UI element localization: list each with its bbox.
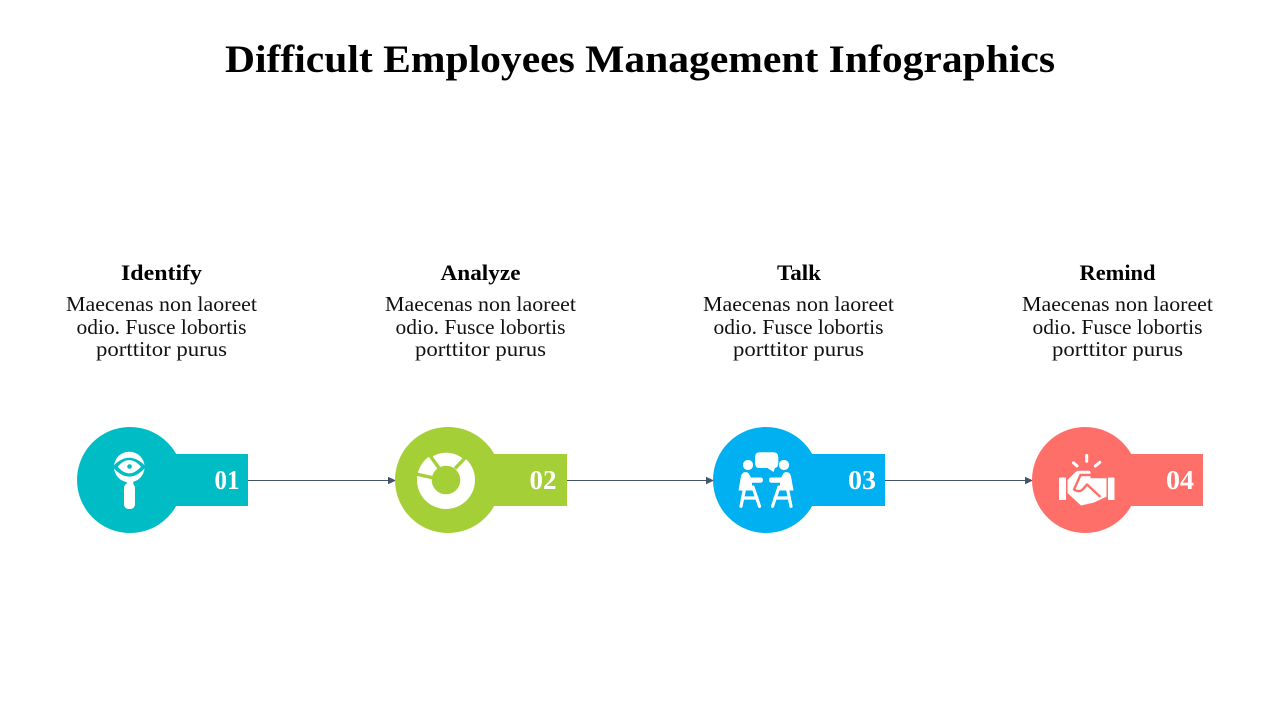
panel: remind <box>1022 260 1213 533</box>
text block: remind: Maecenas non laoreet <box>1022 292 1213 316</box>
text block: talk: Maecenas non laoreet <box>703 292 894 316</box>
badge: 02 <box>395 427 567 533</box>
icon: magnifying glass with eye <box>112 452 146 509</box>
heading: remind: Remind <box>1080 260 1156 285</box>
text block: remind <box>1022 292 1213 361</box>
text block: analyze: odio. Fusce lobortis <box>396 315 566 339</box>
text block: analyze: porttitor purus <box>415 337 546 361</box>
heading: talk: Talk <box>777 260 822 285</box>
text block: identify: porttitor purus <box>96 337 227 361</box>
text block: talk: odio. Fusce lobortis <box>714 315 884 339</box>
icon: donut chart <box>416 451 475 509</box>
arrow: 03 to 04 <box>885 477 1033 484</box>
panel: identify <box>66 260 257 533</box>
text block: talk <box>703 292 894 361</box>
panel: talk <box>703 260 894 533</box>
icon: handshake <box>1059 456 1114 506</box>
icon: two people talking <box>738 452 794 506</box>
arrow: 02 to 03 <box>567 477 714 484</box>
text block: identify: Maecenas non laoreet <box>66 292 257 316</box>
text block: remind: porttitor purus <box>1052 337 1183 361</box>
badge: 03 <box>713 427 885 533</box>
panel: analyze <box>385 260 576 533</box>
text block: talk: porttitor purus <box>733 337 864 361</box>
text block: identify: odio. Fusce lobortis <box>76 315 246 339</box>
text block: remind: odio. Fusce lobortis <box>1032 315 1202 339</box>
badge: 04 <box>1032 427 1203 533</box>
title: Difficult Employees Management Infographics <box>225 38 1055 81</box>
text block: analyze: Maecenas non laoreet <box>385 292 576 316</box>
number 03: 03 <box>848 465 876 495</box>
number 02: 02 <box>530 465 556 495</box>
text block: identify <box>66 292 257 361</box>
badge: 01 <box>77 427 248 533</box>
arrow: 01 to 02 <box>248 477 396 484</box>
number 01: 01 <box>214 465 240 495</box>
heading: analyze: Analyze <box>440 260 521 285</box>
number 04: 04 <box>1166 465 1194 495</box>
text block: analyze <box>385 292 576 361</box>
heading: identify: Identify <box>121 260 202 285</box>
